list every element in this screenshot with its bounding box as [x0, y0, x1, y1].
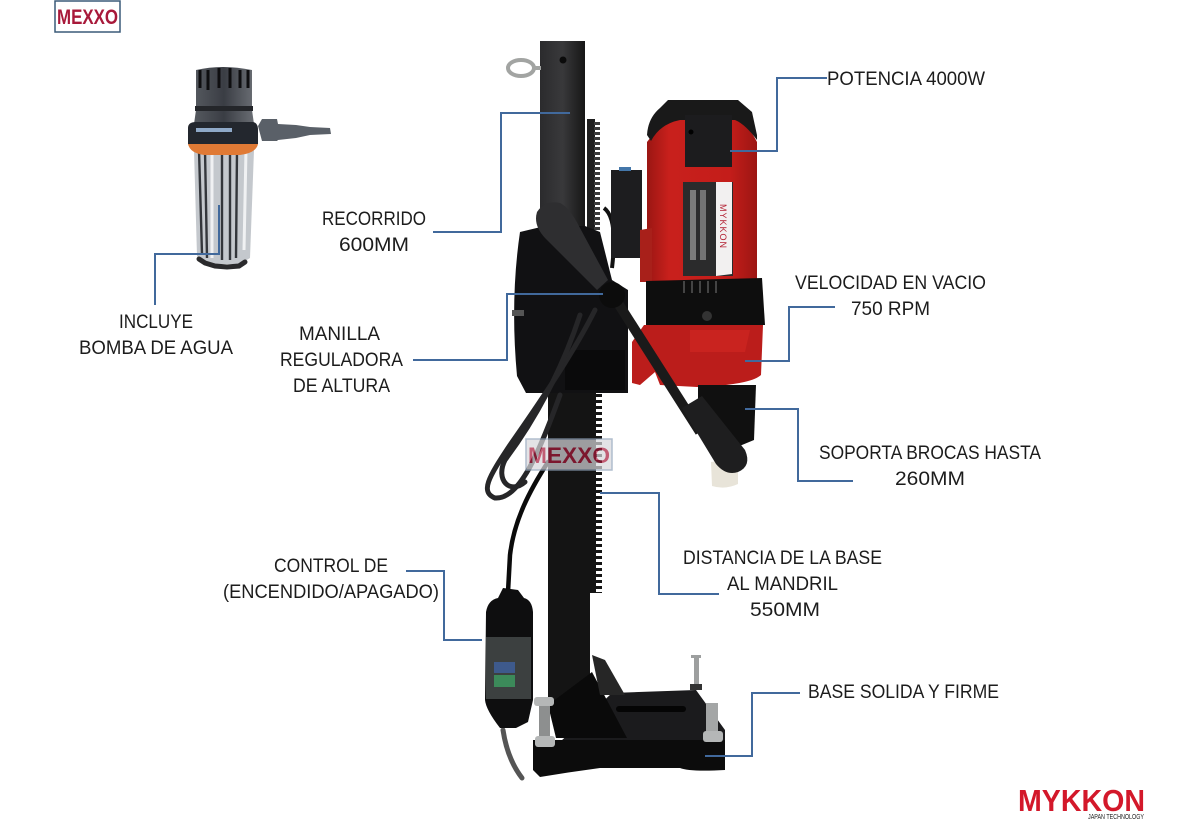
chuck — [698, 385, 756, 452]
logo: MEXXO top left: MEXXO — [57, 6, 118, 29]
callout: bomba de agua — [79, 205, 233, 359]
callout: potencia — [730, 69, 985, 151]
callout: velocidad: 750 RPM — [851, 299, 930, 320]
left curved plate — [514, 226, 628, 393]
logo: MYKKON: MYKKON — [1018, 783, 1145, 818]
lower grip — [682, 396, 747, 473]
callout: control: (ENCENDIDO/APAGADO) — [223, 582, 439, 603]
callout: recorrido: 600MM — [339, 235, 409, 256]
callout: bomba de agua: BOMBA DE AGUA — [79, 338, 233, 359]
rod — [616, 300, 700, 432]
callout: distancia: DISTANCIA DE LA BASE — [683, 548, 882, 569]
callout: distancia: AL MANDRIL — [727, 574, 838, 595]
pump outlet nozzle — [258, 119, 331, 141]
lower column — [548, 390, 590, 705]
side bracket — [640, 228, 652, 282]
callout: recorrido: RECORRIDO — [322, 209, 426, 230]
vent band — [646, 278, 765, 325]
lifting eye bolt — [508, 60, 541, 76]
upper column — [540, 41, 585, 241]
drill stand column — [508, 41, 597, 705]
rear bolt — [690, 655, 702, 690]
pump motor head — [194, 67, 254, 124]
rating plate — [683, 182, 733, 276]
height handle — [536, 202, 747, 473]
callout: manilla: DE ALTURA — [293, 376, 390, 397]
white drill stub — [711, 458, 738, 488]
pump collar — [188, 122, 258, 144]
callout: recorrido — [322, 113, 570, 256]
left bolt — [534, 697, 555, 747]
drill carriage — [512, 208, 628, 393]
front of base — [533, 740, 725, 777]
power cable — [487, 310, 595, 778]
callout: manilla — [280, 294, 603, 397]
control switch box — [485, 588, 533, 728]
gusset — [548, 672, 627, 738]
icon: water pump — [188, 67, 331, 267]
callout: base: BASE SOLIDA Y FIRME — [808, 682, 999, 703]
callout: bomba de agua: INCLUYE — [119, 312, 193, 333]
callout: velocidad: VELOCIDAD EN VACIO — [795, 273, 986, 294]
upper rack — [587, 119, 595, 231]
callout: potencia: POTENCIA 4000W — [827, 69, 985, 90]
black motor cap — [647, 100, 757, 141]
rating plate: MYKKON — [718, 204, 728, 248]
switch housing — [611, 167, 642, 258]
pump orange ring — [188, 144, 258, 155]
right bolt — [703, 703, 723, 742]
hub — [599, 282, 625, 308]
callout: brocas: 260MM — [895, 469, 965, 490]
callout: velocidad — [745, 273, 986, 361]
callout: control: CONTROL DE — [274, 556, 388, 577]
logo: MEXXO top left — [55, 1, 120, 32]
lower red housing — [632, 325, 763, 387]
base plate — [533, 655, 725, 777]
red motor body — [647, 118, 757, 282]
top plate — [560, 690, 725, 745]
callout: distancia — [600, 493, 882, 621]
callout: control — [223, 556, 482, 640]
upper grip — [536, 202, 608, 290]
callout: manilla: REGULADORA — [280, 350, 403, 371]
pump strainer cage — [194, 150, 254, 267]
callout: base — [705, 682, 999, 756]
brush cover — [685, 115, 732, 167]
callout: distancia: 550MM — [750, 600, 820, 621]
callout: brocas: SOPORTA BROCAS HASTA — [819, 443, 1041, 464]
lower rack — [590, 388, 596, 593]
drill motor — [632, 100, 765, 488]
callout: brocas — [745, 409, 1041, 490]
logo: MEXXO watermark: MEXXO — [528, 443, 610, 468]
callout: manilla: MANILLA — [299, 324, 380, 345]
